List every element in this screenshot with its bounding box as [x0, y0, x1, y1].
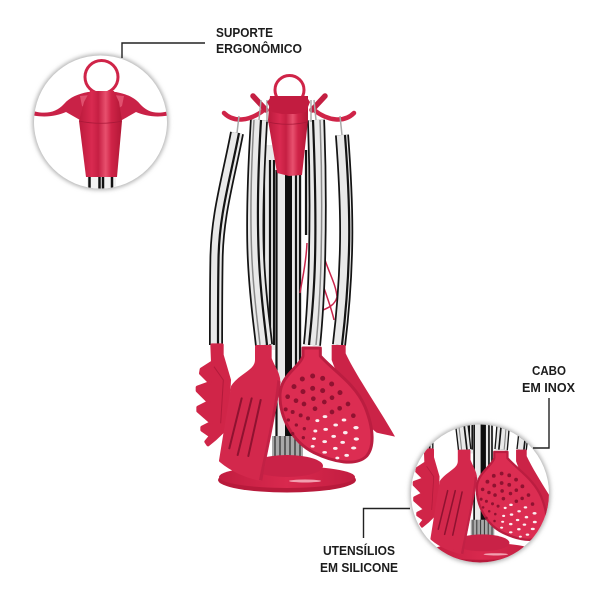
stand base [218, 466, 356, 492]
support body [79, 91, 122, 177]
utensil: slotted turner [221, 347, 281, 481]
label: utensils: EM SILICONE [320, 561, 398, 575]
steel handles under support [87, 177, 116, 189]
label: handle: CABO [532, 364, 566, 378]
central pole and handles [216, 120, 349, 477]
inset circle: silicone and stainless steel detail [407, 420, 553, 566]
stand head with ring and arms [224, 76, 354, 176]
label: handle [522, 364, 576, 395]
inset circle: ergonomic support [30, 54, 172, 190]
leader line: handle [533, 398, 549, 448]
label: utensils: UTENSÍLIOS [323, 543, 395, 558]
product: kitchen utensil set on stand [197, 76, 395, 492]
label: support [216, 26, 302, 56]
label: handle: EM INOX [522, 381, 576, 395]
utensil: pasta server [197, 345, 229, 445]
label: support: ERGONÔMICO [216, 41, 302, 56]
utensil: spatula (rear right) [332, 345, 395, 437]
utensil: skimmer with holes [280, 348, 372, 462]
label: utensils [320, 543, 398, 575]
support arms [30, 92, 172, 120]
leader line: utensils [364, 508, 410, 538]
leader line: support [122, 43, 205, 58]
support ring [85, 60, 118, 94]
label: support: SUPORTE [216, 26, 273, 40]
silicone utensil heads [197, 345, 395, 481]
